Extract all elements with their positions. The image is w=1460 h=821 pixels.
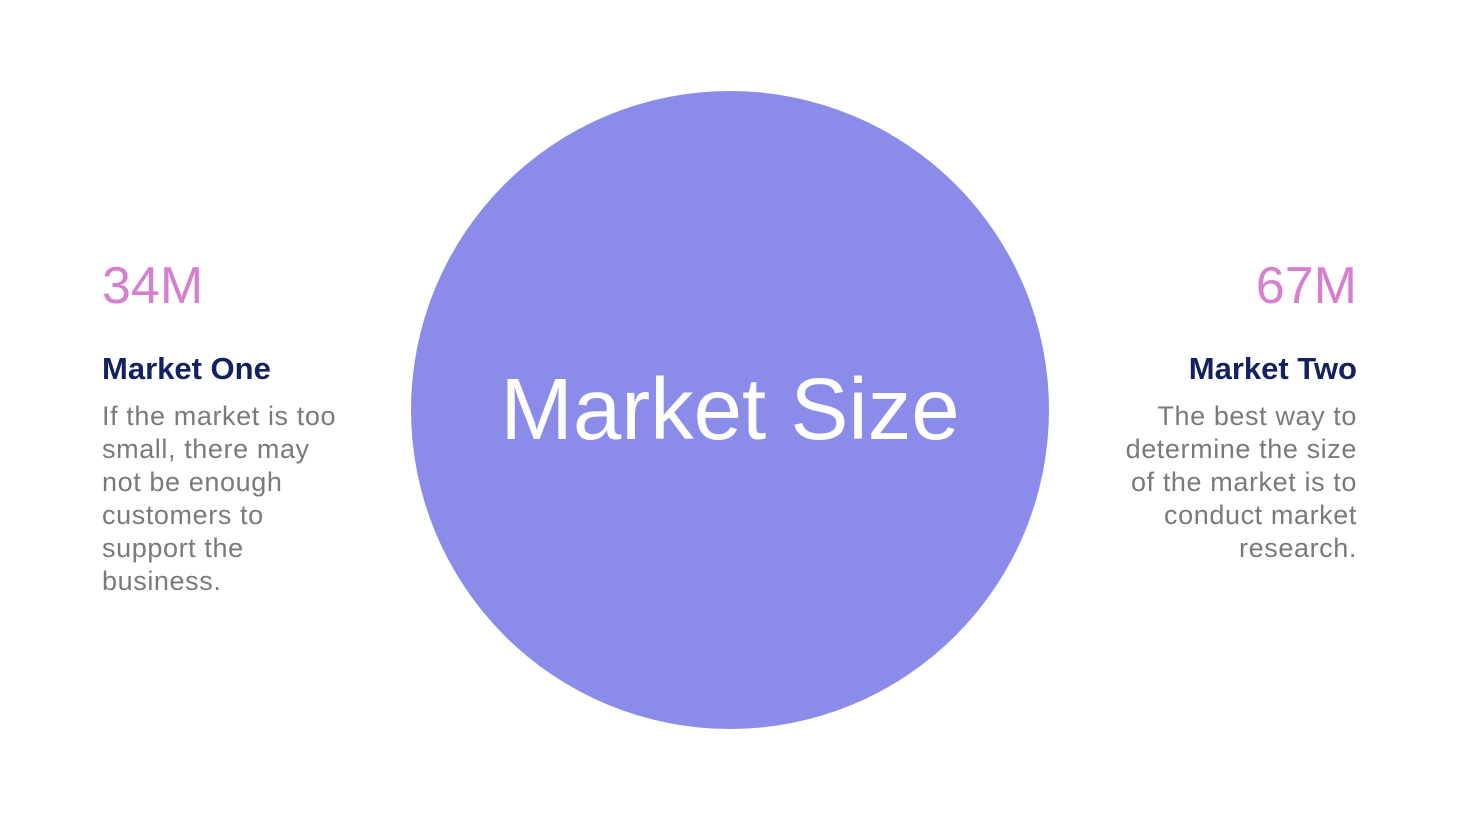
text: market two description: conduct market [1164, 500, 1357, 530]
panel: market two [1126, 257, 1357, 563]
text: market one description: not be enough [102, 467, 282, 497]
panel: market one [102, 257, 336, 596]
text: market two description: of the market is to [1131, 467, 1357, 497]
value: 67M: 67M [1256, 257, 1357, 315]
text: market one description [102, 401, 336, 596]
text: market one description: support the [102, 533, 244, 563]
text: market two description: determine the size [1126, 434, 1357, 464]
heading: Market Two: Market Two [1189, 351, 1357, 386]
text: market two description [1126, 401, 1357, 563]
text: market two description: research. [1239, 533, 1357, 563]
text: market one description: business. [102, 566, 221, 596]
text: market two description: The best way to [1157, 401, 1357, 431]
circle: market size [411, 91, 1049, 729]
text: market one description: customers to [102, 500, 264, 530]
text: market one description: If the market is too [102, 401, 336, 431]
circle title: Market Size [500, 361, 960, 458]
text: market one description: small, there may [102, 434, 310, 464]
heading: Market One: Market One [102, 351, 271, 386]
value: 34M: 34M [102, 257, 203, 315]
